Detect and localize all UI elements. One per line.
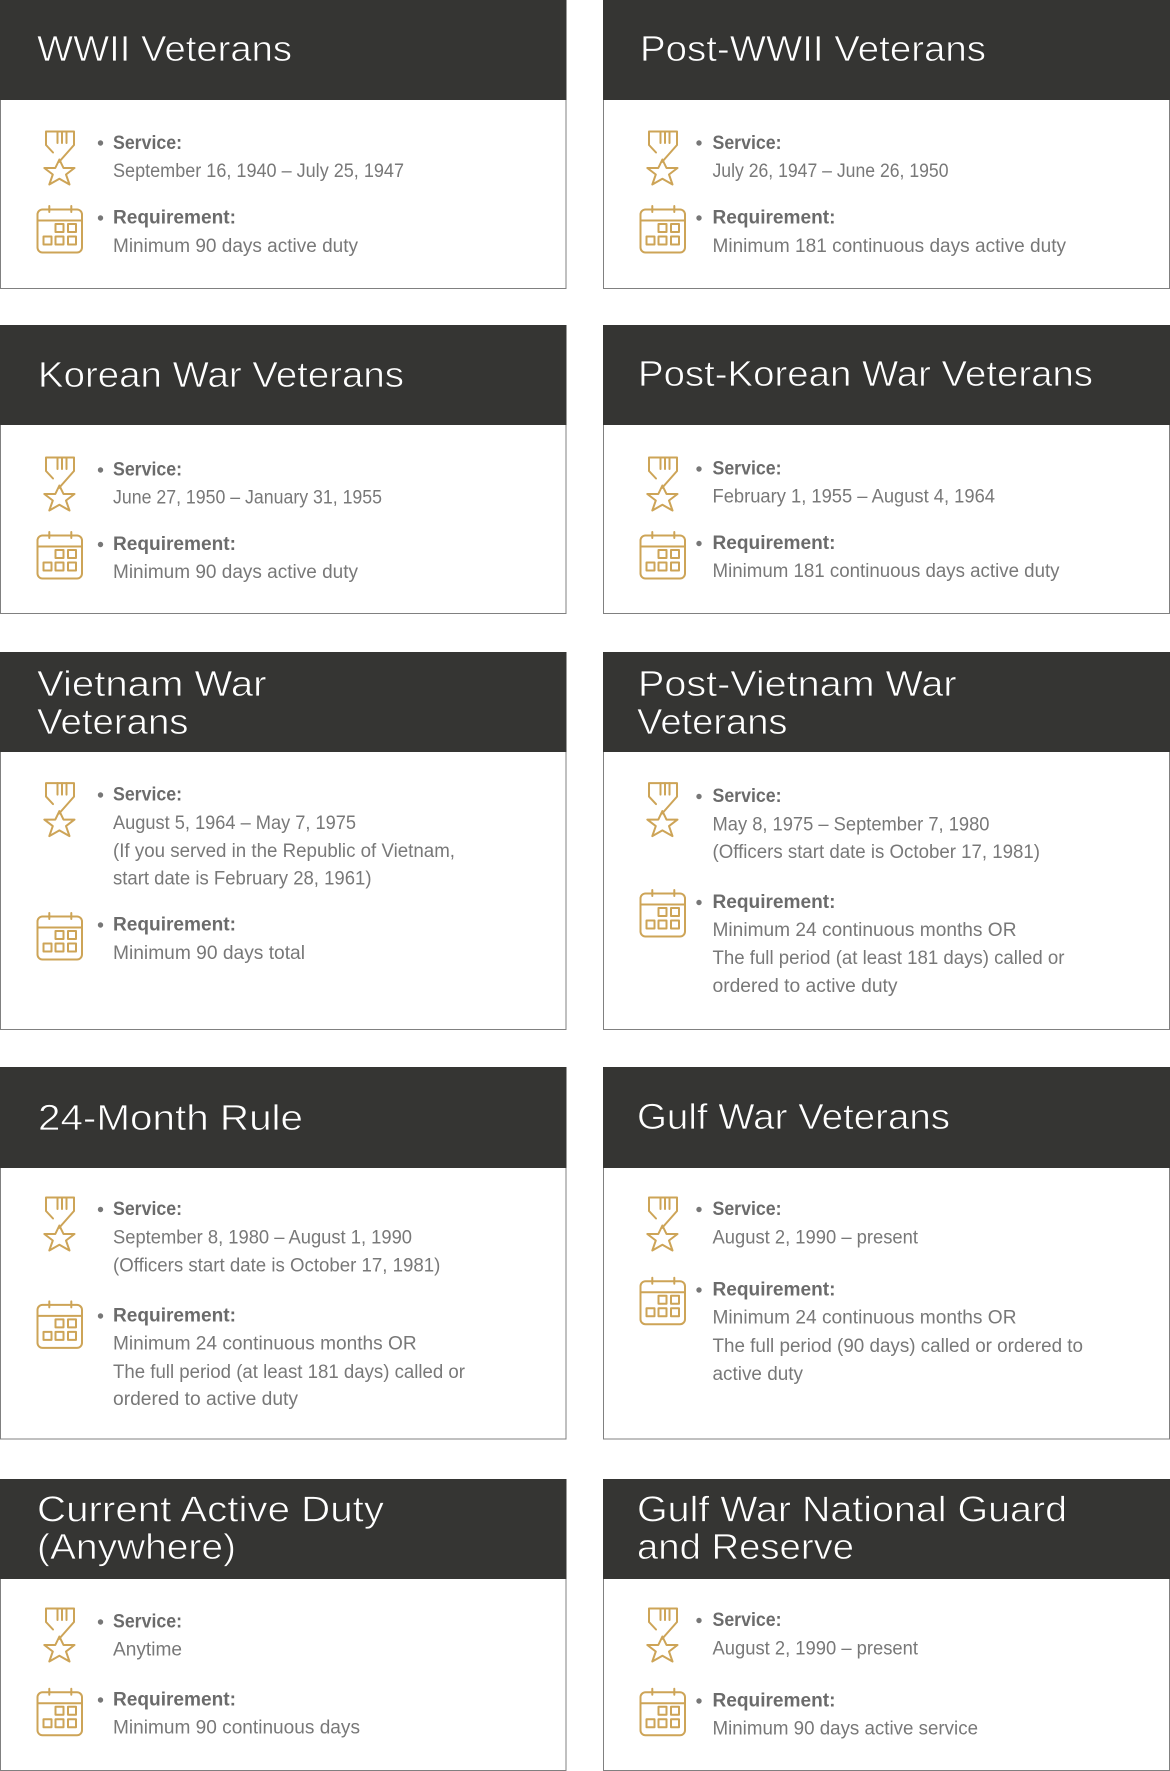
- title: WWII Veterans: [37, 28, 292, 69]
- requirement text: Requirement:: [712, 1279, 836, 1300]
- title: Gulf War Veterans: [637, 1096, 950, 1137]
- panel: WWII Veterans: [0, 0, 566, 288]
- panel: 24-Month Rule: [0, 1067, 566, 1439]
- service text: Service:: [113, 1611, 182, 1632]
- requirement text: Requirement:: [712, 892, 836, 913]
- icon: medal: [44, 1198, 74, 1250]
- requirement text: Minimum 90 continuous days: [113, 1718, 360, 1738]
- requirement text: [696, 1690, 978, 1740]
- requirement text: [98, 534, 358, 583]
- title: Post-Vietnam War: [638, 663, 957, 704]
- service text: [98, 460, 382, 509]
- header bar: [0, 1479, 566, 1579]
- icon: calendar: [38, 913, 82, 960]
- service text: August 2, 1990 – present: [712, 1227, 919, 1248]
- requirement text: Requirement:: [712, 208, 836, 229]
- header bar: [603, 325, 1170, 425]
- icon: calendar: [38, 206, 82, 252]
- requirement text: Minimum 90 days active duty: [113, 562, 358, 583]
- requirement text: [98, 1305, 466, 1410]
- requirement text: Minimum 181 continuous days active duty: [712, 236, 1067, 257]
- service text: September 8, 1980 – August 1, 1990: [113, 1227, 412, 1248]
- requirement text: [98, 915, 305, 964]
- requirement text: The full period (at least 181 days) called or: [712, 948, 1065, 969]
- service text: [98, 133, 404, 182]
- service text: August 2, 1990 – present: [712, 1638, 919, 1659]
- requirement text: The full period (90 days) called or ordered to: [712, 1336, 1083, 1357]
- requirement text: ordered to active duty: [712, 976, 898, 997]
- service text: February 1, 1955 – August 4, 1964: [712, 487, 995, 508]
- service text: (Officers start date is October 17, 1981): [712, 842, 1040, 863]
- panel: Vietnam War Veterans: [0, 652, 566, 1030]
- requirement text: [98, 1689, 360, 1738]
- requirement text: Requirement:: [712, 533, 836, 554]
- requirement text: Requirement:: [113, 1305, 236, 1326]
- requirement text: ordered to active duty: [113, 1389, 299, 1410]
- requirement text: [696, 1279, 1083, 1385]
- requirement text: active duty: [712, 1364, 803, 1385]
- service text: May 8, 1975 – September 7, 1980: [712, 814, 990, 836]
- service text: September 16, 1940 – July 25, 1947: [113, 161, 404, 182]
- header bar: [0, 652, 566, 752]
- title: Gulf War National Guard: [637, 1488, 1067, 1530]
- icon: calendar: [640, 206, 685, 252]
- requirement text: Minimum 24 continuous months OR: [113, 1334, 417, 1354]
- title: [637, 663, 957, 742]
- service text: [98, 1611, 182, 1661]
- icon: medal: [44, 1608, 74, 1662]
- title: (Anywhere): [37, 1526, 236, 1567]
- requirement text: Requirement:: [113, 1689, 236, 1710]
- service text: [696, 458, 995, 508]
- title: Post-WWII Veterans: [640, 28, 986, 69]
- title: [637, 1488, 1067, 1567]
- requirement text: Minimum 90 days active service: [712, 1719, 978, 1740]
- title: Current Active Duty: [37, 1488, 384, 1530]
- service text: August 5, 1964 – May 7, 1975: [113, 813, 356, 834]
- service text: Service:: [712, 458, 782, 480]
- panel: Korean War Veterans: [0, 325, 566, 614]
- icon: calendar: [38, 532, 82, 578]
- service text: Service:: [113, 1199, 182, 1220]
- requirement text: Requirement:: [113, 208, 236, 229]
- header bar: [603, 1479, 1170, 1579]
- header bar: [603, 0, 1170, 100]
- title: Veterans: [637, 701, 788, 742]
- title: [37, 1488, 384, 1567]
- requirement text: Minimum 24 continuous months OR: [712, 1308, 1016, 1329]
- header bar: [0, 1067, 566, 1168]
- service text: [696, 1610, 919, 1659]
- icon: medal: [44, 458, 74, 510]
- panel: Gulf War National Guard and Reserve: [603, 1479, 1170, 1770]
- service text: Service:: [113, 133, 182, 154]
- title: Post-Korean War Veterans: [638, 353, 1093, 394]
- requirement text: The full period (at least 181 days) called or: [113, 1362, 466, 1383]
- service text: [98, 1199, 440, 1277]
- service text: [696, 786, 1040, 863]
- icon: medal: [44, 132, 74, 184]
- icon: medal: [647, 783, 678, 836]
- requirement text: Requirement:: [712, 1690, 836, 1711]
- title: Korean War Veterans: [38, 354, 404, 395]
- icon: medal: [647, 1198, 678, 1250]
- icon: medal: [647, 1608, 678, 1662]
- title: 24-Month Rule: [38, 1097, 303, 1138]
- requirement text: Requirement:: [113, 534, 236, 555]
- icon: calendar: [38, 1301, 82, 1348]
- icon: medal: [647, 458, 678, 510]
- service text: Service:: [712, 1610, 782, 1631]
- header bar: [0, 0, 566, 100]
- requirement text: [696, 892, 1065, 997]
- header bar: [0, 325, 566, 425]
- title: Veterans: [37, 701, 188, 742]
- requirement text: [98, 208, 358, 257]
- service text: start date is February 28, 1961): [113, 868, 372, 890]
- panel: Post-Vietnam War Veterans: [603, 652, 1170, 1030]
- panel: Current Active Duty (Anywhere): [0, 1479, 566, 1770]
- service text: (Officers start date is October 17, 1981): [113, 1256, 440, 1277]
- requirement text: Requirement:: [113, 915, 236, 936]
- title: Vietnam War: [37, 663, 267, 704]
- service text: July 26, 1947 – June 26, 1950: [712, 161, 948, 182]
- icon: calendar: [640, 1278, 685, 1324]
- icon: medal: [647, 132, 678, 184]
- icon: calendar: [640, 890, 685, 936]
- service text: June 27, 1950 – January 31, 1955: [113, 488, 382, 509]
- header bar: [603, 1067, 1170, 1168]
- icon: calendar: [640, 532, 685, 578]
- header bar: [603, 652, 1170, 752]
- service text: Anytime: [113, 1640, 182, 1661]
- title: [37, 663, 267, 742]
- requirement text: [696, 533, 1060, 582]
- service text: Service:: [712, 786, 782, 807]
- service text: (If you served in the Republic of Vietnam,: [113, 841, 455, 862]
- service text: [98, 785, 455, 890]
- panel: Post-WWII Veterans: [603, 0, 1170, 288]
- service text: Service:: [113, 460, 182, 480]
- requirement text: Minimum 181 continuous days active duty: [712, 561, 1060, 582]
- service text: [696, 1199, 919, 1248]
- requirement text: Minimum 90 days total: [113, 943, 305, 964]
- requirement text: Minimum 90 days active duty: [113, 236, 358, 257]
- panel: Gulf War Veterans: [603, 1067, 1170, 1439]
- icon: medal: [44, 783, 74, 836]
- panel: Post-Korean War Veterans: [603, 325, 1170, 614]
- icon: calendar: [640, 1689, 685, 1735]
- service text: Service:: [712, 1199, 782, 1220]
- service text: Service:: [712, 133, 782, 154]
- requirement text: Minimum 24 continuous months OR: [712, 920, 1016, 941]
- service text: [696, 133, 948, 182]
- title: and Reserve: [637, 1526, 854, 1567]
- requirement text: [696, 208, 1067, 257]
- icon: calendar: [38, 1689, 82, 1735]
- service text: Service:: [113, 785, 182, 806]
